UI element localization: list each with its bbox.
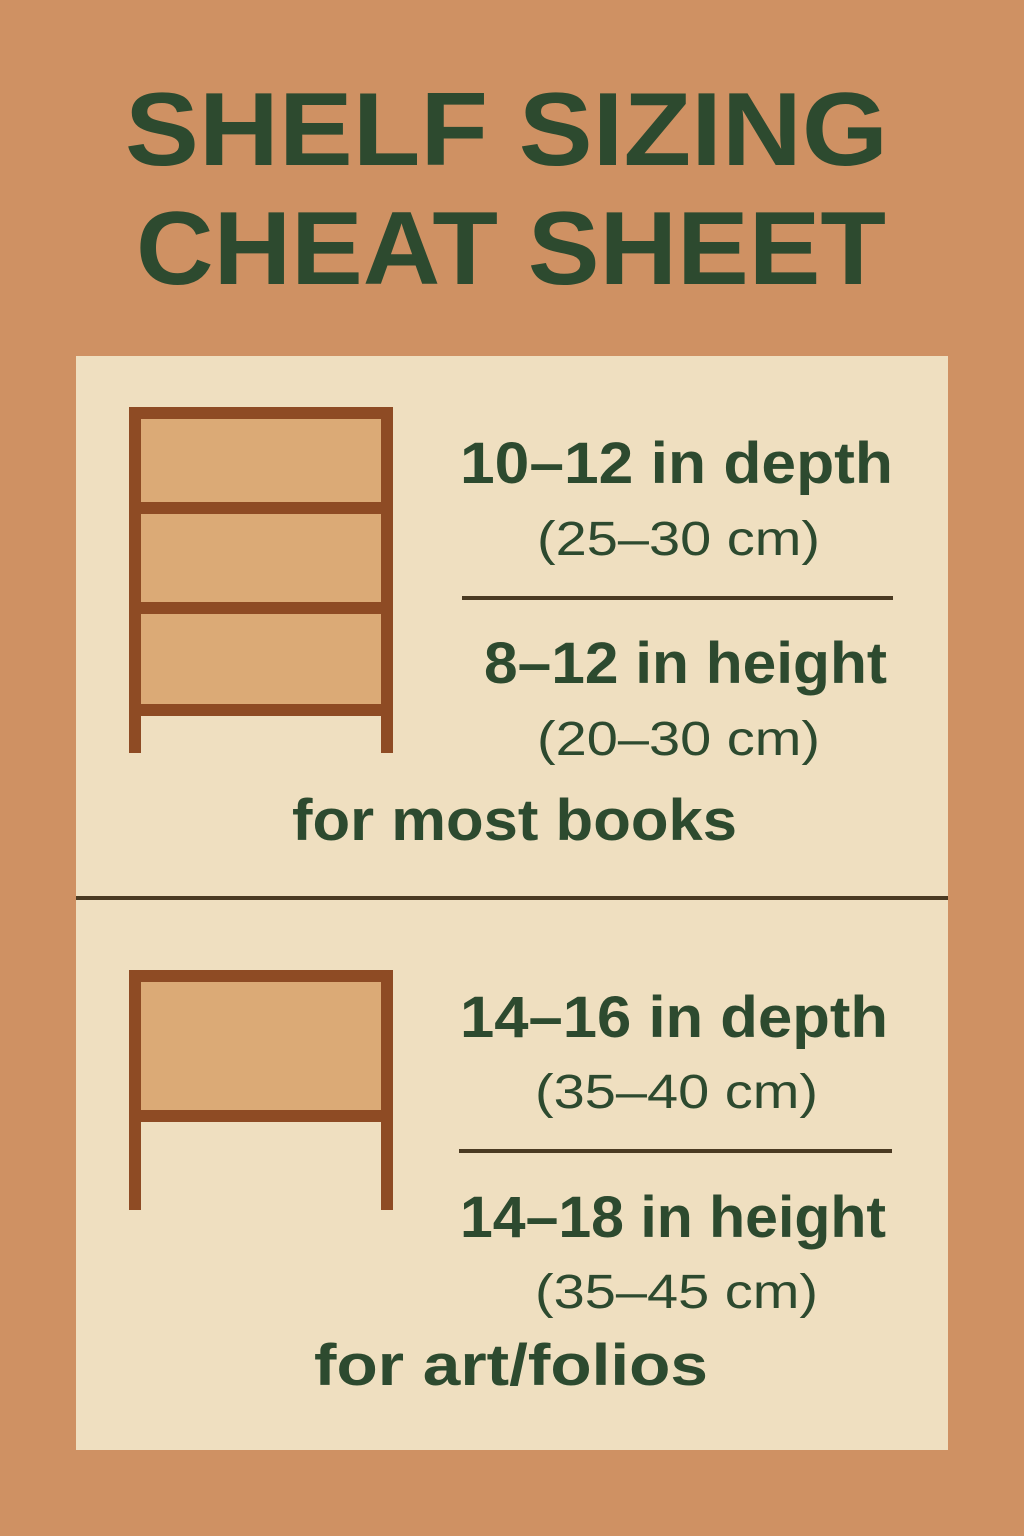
text: depth: 10–12 in depth	[460, 431, 893, 496]
text: depth	[460, 985, 888, 1119]
icon: bookshelf with three shelves	[129, 407, 393, 753]
text: height: (35–45 cm)	[535, 1266, 818, 1319]
title: SHELF SIZING	[125, 72, 888, 188]
title	[125, 72, 888, 307]
text: depth: (25–30 cm)	[537, 513, 820, 566]
text: height: 14–18 in height	[460, 1185, 886, 1250]
text: height	[460, 1185, 886, 1319]
panel: art/folios	[129, 970, 892, 1398]
panel: cheat sheet card	[76, 356, 948, 1450]
text: height: 8–12 in height	[484, 631, 887, 696]
caption: for art/folios: for art/folios	[314, 1333, 708, 1398]
text: depth: (35–40 cm)	[535, 1066, 818, 1119]
icon: single tall shelf	[129, 970, 393, 1210]
caption: for most books: for most books	[292, 788, 737, 853]
text: depth	[460, 431, 893, 566]
text: depth: 14–16 in depth	[460, 985, 888, 1050]
text: height: (20–30 cm)	[537, 713, 820, 766]
text: height	[484, 631, 887, 766]
title: CHEAT SHEET	[136, 191, 886, 307]
panel: most books	[129, 407, 893, 853]
